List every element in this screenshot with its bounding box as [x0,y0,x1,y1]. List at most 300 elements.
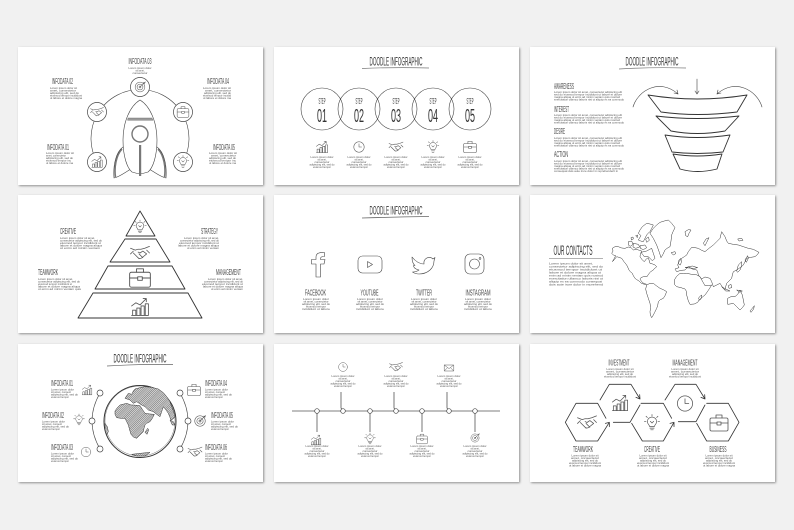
text: Teamwork: adipiscing elit, sed do [572,458,598,462]
connector arc right [177,390,191,452]
globe [104,386,176,458]
timeline captions top: consectetur [388,379,404,383]
timeline captions top: Lorem ipsum dolor [384,374,408,378]
text: Infodata 03: eiusmod tempor [51,459,69,463]
text: Interest: magna aliqua ut enim ad minim veniam quis nostrud [554,118,620,122]
text: Youtube: YOUTUBE [360,288,378,298]
icon: twitter [412,257,435,274]
text: Management: amet, consectetur [671,370,699,374]
text: Twitter: adipiscing elit, sed do [410,302,438,306]
text: Facebook [302,288,331,311]
timeline captions bottom [304,444,488,458]
text: Infodata 04 [203,77,231,100]
text: Infodata 02 [42,411,69,431]
text: Infodata 06: INFODATA 06 [205,443,227,452]
text: Management [669,358,701,378]
icon: chart [612,395,628,411]
text: Instagram: adipiscing elit, sed do [464,302,492,306]
text: Investment: INVESTMENT [608,358,630,368]
timeline captions top [330,374,462,388]
timeline captions top: eiusmod tempor [440,384,458,388]
text: Infodata 02: Lorem ipsum dolor [42,420,65,424]
text: Management: Lorem ipsum dolor sit amet, [208,277,243,281]
panel: pyramid [18,195,263,333]
text: Teamwork: ut labore et dolore magna [569,464,601,468]
text: Infodata 05: amet, consectetur [211,154,236,158]
timeline captions bottom: Lorem ipsum dolor [306,444,329,448]
step captions: Lorem ipsum dolor [310,155,334,159]
text: Action: magna aliqua ut enim ad minim veniam quis nostrud [554,164,620,168]
text: Infodata 01: eiusmod tempor inc [46,158,72,162]
timeline captions bottom: eiusmod tempor [466,454,484,458]
text: Creative [60,227,102,250]
step captions: eiusmod tempor [424,165,442,169]
text: Action: consequat duis aute irure dolor in reprehenderit in [554,169,618,173]
timeline captions bottom: adipiscing elit, sed do [410,452,435,456]
timeline captions bottom: consectetur [310,449,325,453]
text: Creative: CREATIVE [60,227,76,236]
connector arc left [89,390,103,452]
text: Management: eiusmod tempor incididunt [669,374,701,378]
text: Business [703,445,735,468]
timeline captions top: consectetur [442,379,457,383]
step captions [310,155,483,169]
text: Business: eiusmod tempor incididunt [703,461,735,465]
text: Management: labore et dolore magna aliqua [203,284,243,288]
text: Desire: exercitation ullamco laboris nisi ut aliquip ex ea commodo [554,144,624,148]
icon: chart [82,385,92,395]
text: Business: adipiscing elit, sed do [706,458,732,462]
text: Infodata 04: Lorem ipsum dolor [205,388,228,392]
text: Infodata 02: eiusmod tempor incididunt [50,94,82,98]
icon: briefcase in circle [174,102,192,122]
text: Instagram: sit amet, consectetur [466,300,491,304]
text: Infodata 01: eiusmod tempor [51,395,69,399]
text: Teamwork: labore et dolore magna aliqua [38,284,80,288]
text: Teamwork: eiusmod tempor incididunt [569,461,601,465]
timeline axis [292,392,500,432]
step captions: sit amet, [392,158,401,162]
icon: bulb [427,140,439,152]
panel: five steps [274,47,519,185]
text: Facebook: FACEBOOK [305,288,326,298]
step captions: Lorem ipsum dolor [422,155,445,159]
icon: mail [444,365,454,371]
text: Infodata 03: Lorem ipsum dolor [51,452,74,456]
icon: bulb in circle [174,152,192,172]
step captions: eiusmod tempor [313,165,331,169]
panel: pyramid: STRATEGY [201,227,218,236]
text: Infodata 01 [51,379,78,399]
title [362,54,429,68]
timeline captions top: Lorem ipsum dolor [332,374,355,378]
text: Business: BUSINESS [710,445,726,454]
text: Teamwork: amet, consectetur [571,456,599,460]
text: Strategy [178,227,220,250]
text: Teamwork [38,268,82,291]
step captions: eiusmod tempor [350,165,368,169]
step captions: eiusmod tempor [387,165,405,169]
contact text: labore et dolore magna aliqua ut [549,270,601,274]
text: Infodata 01: adipiscing elit, sed do [46,156,73,160]
text: Teamwork: TEAMWORK [573,445,593,454]
text: Creative: Lorem ipsum dolor sit amet, [60,236,95,240]
text: Teamwork: ut enim ad minim veniam quis [38,287,82,291]
step circles: 05 [465,106,475,126]
text: Action: Lorem ipsum dolor sit amet, consectetur adipiscing elit [554,159,622,163]
text: Infodata 04: ut labore et dolore ma [203,96,231,100]
timeline captions bottom: adipiscing elit, sed do [358,452,383,456]
text: Infodata 03 [51,443,78,463]
text: Creative: adipiscing elit, sed do [640,458,666,462]
text: Strategy: consectetur adipiscing elit, sed do [180,238,219,242]
text: Creative: eiusmod tempor incididunt ut [60,241,101,245]
panel: funnel: DOODLE INFOGRAPHIC [626,54,679,68]
panel: globe [18,344,263,482]
timeline captions bottom: consectetur [362,449,378,453]
text: Youtube [356,288,385,311]
step circles: STEP [392,97,400,106]
icon: youtube [358,256,382,273]
step captions: adipiscing elit, sed do [346,162,372,166]
timeline captions bottom: sit amet, [418,446,427,450]
text: Infodata 01: INFODATA 01 [51,379,73,388]
text: Infodata 04: adipiscing elit, sed do [205,392,232,396]
text: Creative: consectetur adipiscing elit, sed do [60,238,102,242]
panel: our contacts: OUR CONTACTS [554,242,592,258]
text: Infodata 04: eiusmod tempor [205,395,223,399]
text: Management [202,268,244,291]
text: Creative: Lorem ipsum dolor sit [640,454,667,458]
text: Twitter: incididunt ut labore [410,307,439,311]
text: Infodata 04: adipiscing elit, sed do [204,91,231,95]
text: Infodata 01: amet, consectetur [46,154,66,158]
timeline captions top: sit amet, [444,376,454,380]
text: Desire: DESIRE [554,127,565,136]
text: Infodata 03 [128,57,152,75]
text: Investment: Lorem ipsum dolor sit [606,367,634,371]
text: Business: Lorem ipsum dolor sit [706,454,733,458]
step captions: sit amet, [466,158,475,162]
icon: clock [339,363,347,371]
text: Investment: amet, consectetur [606,370,634,374]
text: Creative: ut enim ad minim veniam [60,246,101,250]
timeline captions bottom: sit amet, [470,446,480,450]
timeline captions bottom: eiusmod tempor [361,454,379,458]
text: Creative: ut labore et dolore magna [637,464,669,468]
step captions: Lorem ipsum dolor [348,155,371,159]
text: Infodata 05: adipiscing elit, sed do [211,424,238,428]
text: Infodata 01: ut labore et dolore ma [46,161,73,165]
icon: briefcase [710,415,728,431]
icon: target in circle [130,78,150,96]
text: Strategy: ut enim ad minim veniam [187,246,220,250]
text: Awareness: AWARENESS [554,82,574,91]
step captions: adipiscing elit, sed do [420,162,446,166]
text: Creative: CREATIVE [644,445,660,454]
text: Infodata 04 [205,379,232,399]
text: Instagram: incididunt ut labore [464,307,493,311]
timeline captions top: adipiscing elit, sed do [436,382,462,386]
text: Twitter [410,288,439,311]
icon: handshake [578,416,596,428]
text: Twitter: sit amet, consectetur [412,300,437,304]
text: Teamwork: TEAMWORK [38,268,58,277]
text: Strategy: Lorem ipsum dolor sit amet, [184,236,219,240]
text: Management: consectetur adipiscing elit, sed do [204,280,243,284]
timeline captions bottom: eiusmod tempor [308,454,326,458]
step captions: consectetur [314,160,330,164]
text: Facebook: Lorem ipsum dolor [303,297,329,301]
text: Infodata 02: INFODATA 02 [42,411,64,420]
panel: our contacts [530,195,775,333]
contact text: consectetur adipiscing elit, sed do [549,264,604,268]
text: Creative: labore et dolore magna aliqua [60,244,102,248]
text: Management: adipiscing elit, sed do [672,372,698,376]
step captions: adipiscing elit, sed do [310,162,335,166]
text: Teamwork [569,445,601,468]
icon: target [471,434,479,442]
contact text [549,262,604,286]
icon: bulb [74,414,84,425]
text: Creative [637,445,669,468]
icon: clock [81,447,91,457]
icon: clock [677,396,693,411]
timeline captions bottom: sit amet, [312,446,322,450]
text: Desire: magna aliqua ut enim ad minim veniam quis nostrud [554,141,620,145]
world map [612,220,759,318]
text: Instagram: eiusmod tempor [468,304,488,308]
text: Interest: Lorem ipsum dolor sit amet, consectetur adipiscing elit [554,113,622,117]
panel: social media [274,195,519,333]
step captions: adipiscing elit, sed do [384,162,409,166]
text: Action: ACTION [554,150,568,159]
timeline captions bottom: adipiscing elit, sed do [462,452,488,456]
text: Infodata 02: Lorem ipsum dolor sit [50,86,77,90]
step circles: STEP [430,97,436,106]
text: Investment [604,358,636,378]
text: Desire: Lorem ipsum dolor sit amet, consectetur adipiscing elit [554,136,622,140]
icon: bulb [365,433,375,444]
text: Infodata 02: amet, consectetur [50,88,76,92]
timeline captions top: sit amet, [392,376,401,380]
text: Infodata 04: sit amet, consect [205,390,225,394]
icon: handshake in circle [88,102,106,122]
panel: rocket infographic: INFODATA 05 [213,143,235,152]
panel: five steps: DOODLE INFOGRAPHIC [370,54,423,68]
panel: globe: DOODLE INFOGRAPHIC [114,352,167,366]
text: Infodata 03: adipiscing elit, sed do [51,456,78,460]
text: Infodata 05 [209,143,237,165]
text: Interest: INTEREST [554,105,569,114]
step circles: 02 [354,106,364,126]
text: Facebook: sit amet, consectetur [304,300,329,304]
icon: briefcase [417,434,427,444]
text: Strategy: labore et dolore magna aliqua [178,244,219,248]
text: Management: MANAGEMENT [672,358,698,368]
step captions: sit amet, [318,158,327,162]
text: Infodata 02: adipiscing elit, sed do [42,424,69,428]
text: Creative: amet, consectetur [639,456,667,460]
text: Facebook: incididunt ut labore [302,307,331,311]
contact text: exercitation ullamco laboris nisi ut [549,276,603,280]
icon: clock [354,142,364,152]
icon: briefcase [464,141,476,153]
text: Teamwork: eiusmod tempor incididunt ut [38,282,72,286]
icon: chart [132,299,148,315]
text: Infodata 02 [50,77,82,100]
icon: briefcase [188,384,200,396]
arc around rocket [91,90,189,162]
step circles: 01 [317,106,327,126]
text: Infodata 02: adipiscing elit, sed do [50,91,79,95]
text: Awareness: Lorem ipsum dolor sit amet, consectetur adipiscing elit [554,90,622,94]
timeline captions top: consectetur [336,379,351,383]
timeline captions bottom: eiusmod tempor [413,454,431,458]
text: Infodata 01 [46,143,74,165]
timeline captions bottom: Lorem ipsum dolor [410,444,434,448]
text: Infodata 06: sit amet, consect [205,454,225,458]
arrows into funnel [633,79,762,107]
text: Youtube: Lorem ipsum dolor [357,297,383,301]
icon: handshake [130,246,150,259]
timeline captions bottom: Lorem ipsum dolor [464,444,487,448]
text: Infodata 05: INFODATA 05 [211,411,233,420]
text: Action [554,150,624,173]
icon: chart [316,141,328,153]
text: Infodata 03: Lorem ipsum dolor [128,66,152,70]
text: Infodata 01: Lorem ipsum dolor sit [46,151,74,155]
text: Business: amet, consectetur [705,456,733,460]
text: Infodata 01: adipiscing elit, sed do [51,392,78,396]
text: Infodata 03: sit amet, consect [51,454,71,458]
text: Infodata 01: INFODATA 01 [47,143,69,152]
text: Investment: adipiscing elit, sed do [607,372,633,376]
text: Awareness: magna aliqua ut enim ad minim veniam quis nostrud [554,95,620,99]
text: Business: ut labore et dolore magna [703,464,735,468]
text: Infodata 04: Lorem ipsum dolor sit [203,86,231,90]
text: Management: eiusmod tempor incididunt ut [202,282,243,286]
timeline captions bottom: adipiscing elit, sed do [304,452,330,456]
funnel chart [648,95,747,172]
rocket [114,100,166,178]
text: Infodata 02: ut labore et dolore magna [50,96,82,100]
text: Infodata 06: eiusmod tempor [205,459,223,463]
text: Infodata 05: ut labore et dolore ma [209,161,236,165]
step captions: eiusmod tempor [461,165,479,169]
text: Facebook: adipiscing elit, sed do [302,302,330,306]
text: Infodata 02: INFODATA 02 [52,77,73,86]
pyramid chart [78,211,202,318]
step circles: STEP [356,97,362,106]
text: Desire [554,127,624,148]
step circles: 03 [391,106,401,126]
step captions: sit amet, [354,158,364,162]
text: Youtube: incididunt ut labore [356,307,385,311]
text: Infodata 05: eiusmod tempor inc [209,158,237,162]
text: Awareness: sed do eiusmod tempor incididunt ut labore et dolore [554,92,622,96]
text: Infodata 06 [205,443,232,463]
panel: rocket infographic: INFODATA 03 [128,57,152,66]
text: Infodata 06: adipiscing elit, sed do [205,456,232,460]
text: Teamwork: Lorem ipsum dolor sit [572,454,599,458]
timeline captions top: eiusmod tempor [334,384,352,388]
contact text: Lorem ipsum dolor sit amet, [549,262,593,266]
text: Interest: sed do eiusmod tempor incididunt ut labore et dolore [554,116,622,120]
icon: handshake [188,447,202,456]
step captions: adipiscing elit, sed do [458,162,483,166]
step captions: consectetur [352,160,367,164]
icon: target [195,415,206,426]
text: Teamwork: Lorem ipsum dolor sit amet, [38,277,73,281]
step circles: STEP [466,97,474,106]
text: Infodata 04: eiusmod tempor incidid [203,94,231,98]
panel: rocket infographic: INFODATA 04 [207,77,229,86]
text: Youtube: adipiscing elit, sed do [356,302,384,306]
text: Facebook: eiusmod tempor [306,304,326,308]
timeline captions bottom: Lorem ipsum dolor [358,444,382,448]
timeline captions top: sit amet, [338,376,348,380]
timeline captions bottom: consectetur [414,449,430,453]
text: Teamwork: consectetur adipiscing elit, sed do [38,280,80,284]
icon: chart [311,435,321,445]
hexagon chain with arrows [565,384,739,441]
text: Action: sed do eiusmod tempor incididunt ut labore et dolore [554,162,622,166]
timeline captions bottom: sit amet, [366,446,375,450]
timeline captions bottom: consectetur [468,449,483,453]
panel: funnel [530,47,775,185]
timeline captions top: Lorem ipsum dolor [438,374,461,378]
text: Infodata 02: sit amet, consect [42,422,62,426]
step circles: STEP [318,97,326,106]
text: Youtube: eiusmod tempor [360,304,380,308]
panel: social media: DOODLE INFOGRAPHIC [370,204,423,218]
icon: instagram [465,254,484,274]
contact text: eiusmod tempor incididunt ut [549,268,602,272]
contact text: duis aute irure dolor in reprehend [549,282,604,286]
text: Interest [554,105,624,124]
text: Infodata 03: consectetur [132,71,148,75]
icon: handshake [390,362,402,371]
timeline captions top: eiusmod tempor [387,384,405,388]
text: Interest: exercitation ullamco laboris nisi ut aliquip ex ea commodo [554,120,624,124]
title [619,54,686,69]
text: Investment: eiusmod tempor incididunt [604,374,636,378]
panel: pyramid: MANAGEMENT [216,268,241,277]
text: Infodata 05 [211,411,238,431]
text: Strategy: eiusmod tempor incididunt ut [179,241,219,245]
text: Infodata 03: INFODATA 03 [51,443,73,452]
icon: briefcase [130,269,150,287]
text: Management: ut enim ad minim veniam [211,287,244,291]
icon: bulb [644,414,660,430]
text: Awareness [554,82,624,102]
text: Infodata 01: Lorem ipsum dolor [51,388,74,392]
icon: handshake [389,142,403,151]
step captions: consectetur [426,160,441,164]
title [362,204,429,218]
panel: rocket infographic [18,47,263,185]
text: Infodata 05: eiusmod tempor [211,427,229,431]
text: Infodata 05: Lorem ipsum dolor [211,420,234,424]
text: Twitter: eiusmod tempor [414,304,434,308]
text: Twitter: TWITTER [416,288,432,298]
text: Infodata 05: sit amet, consect [211,422,231,426]
text: Management: Lorem ipsum dolor sit [672,367,699,371]
heading: our contacts [549,242,603,258]
contact text: aliquip ex ea commodo consequat [549,280,602,284]
text: Infodata 03: sit amet, [136,68,145,72]
